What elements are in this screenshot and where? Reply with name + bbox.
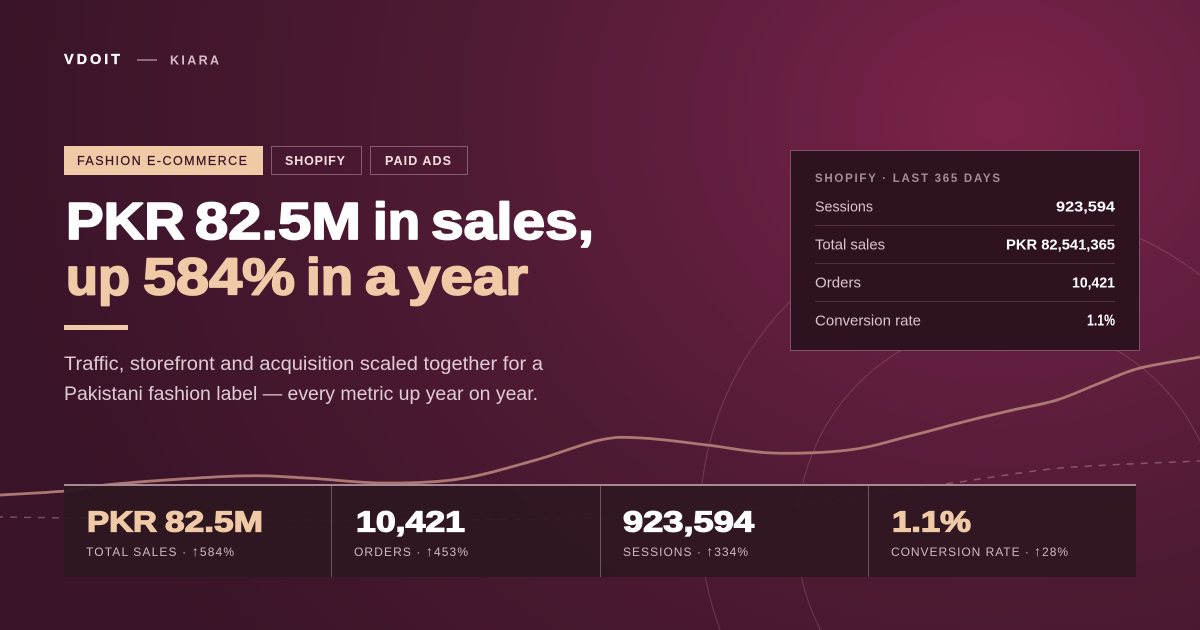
kpi: total sales [86, 506, 263, 559]
kpi: orders [354, 506, 468, 559]
tag: shopify: SHOPIFY [285, 154, 346, 168]
subheading [64, 354, 543, 405]
kpi: orders: 10,421 [356, 506, 465, 538]
headline line 2: up [66, 248, 130, 306]
headline line 2: in [306, 248, 353, 306]
row: total sales: PKR 82,541,365 [1006, 236, 1115, 254]
tag: fashion e-commerce [64, 146, 263, 175]
row: sessions [815, 198, 1116, 216]
solid trend line [0, 357, 1200, 495]
row: conversion rate [815, 312, 1115, 330]
row: total sales [815, 236, 1115, 254]
kpi: total sales: 82.5M [165, 506, 263, 538]
row: sessions: Sessions [815, 198, 873, 216]
kpi: conversion rate: 1.1% [892, 506, 971, 538]
kpi: total sales: PKR [87, 506, 157, 538]
kpi: sessions [623, 506, 754, 559]
row: total sales: Total sales [815, 236, 885, 254]
row: orders: 10,421 [1072, 274, 1115, 292]
accent rule [64, 325, 128, 330]
row: conversion rate: Conversion rate [815, 312, 921, 330]
brand dash [137, 59, 157, 61]
client name: KIARA [170, 54, 219, 68]
headline line 1: in [373, 193, 420, 251]
decorative concentric circles [700, 210, 1200, 630]
brand name: VDOIT [64, 52, 120, 68]
row: orders [815, 274, 1115, 292]
panel label: SHOPIFY · LAST 365 DAYS [815, 173, 1000, 185]
headline line 2: a [365, 248, 399, 306]
headline line 2: year [408, 248, 528, 306]
tags [64, 146, 468, 175]
row: sessions: 923,594 [1056, 198, 1116, 216]
tag: paid ads: PAID ADS [385, 154, 451, 168]
headline line 2: 584% [143, 248, 295, 306]
kpi: sessions: SESSIONS · ↑334% [623, 543, 748, 559]
brand header [64, 52, 219, 68]
kpi: conversion rate [891, 506, 1068, 559]
kpi: orders: ORDERS · ↑453% [354, 543, 468, 559]
row: conversion rate: 1.1% [1087, 312, 1115, 330]
headline line 2 [66, 248, 528, 306]
dashed trend line [0, 461, 1200, 520]
kpi: total sales: TOTAL SALES · ↑584% [86, 543, 234, 559]
headline line 1: PKR [66, 193, 185, 251]
tag: paid ads [370, 146, 468, 174]
subheading line 2: Pakistani fashion label — every metric up year on year. [64, 384, 538, 405]
headline [66, 193, 594, 306]
panel: kpi bar [64, 484, 1136, 577]
kpi: sessions: 923,594 [623, 506, 754, 538]
tag: shopify [272, 146, 362, 174]
headline line 1: sales, [431, 193, 594, 251]
kpi: conversion rate: CONVERSION RATE · ↑28% [891, 543, 1068, 559]
headline line 1: 82.5M [195, 193, 361, 251]
panel: shopify stats [790, 150, 1140, 350]
tag: fashion e-commerce: FASHION E-COMMERCE [77, 154, 247, 168]
headline line 1 [66, 193, 594, 251]
subheading line 1: Traffic, storefront and acquisition scaled together for a [64, 354, 543, 375]
row: orders: Orders [815, 274, 861, 292]
